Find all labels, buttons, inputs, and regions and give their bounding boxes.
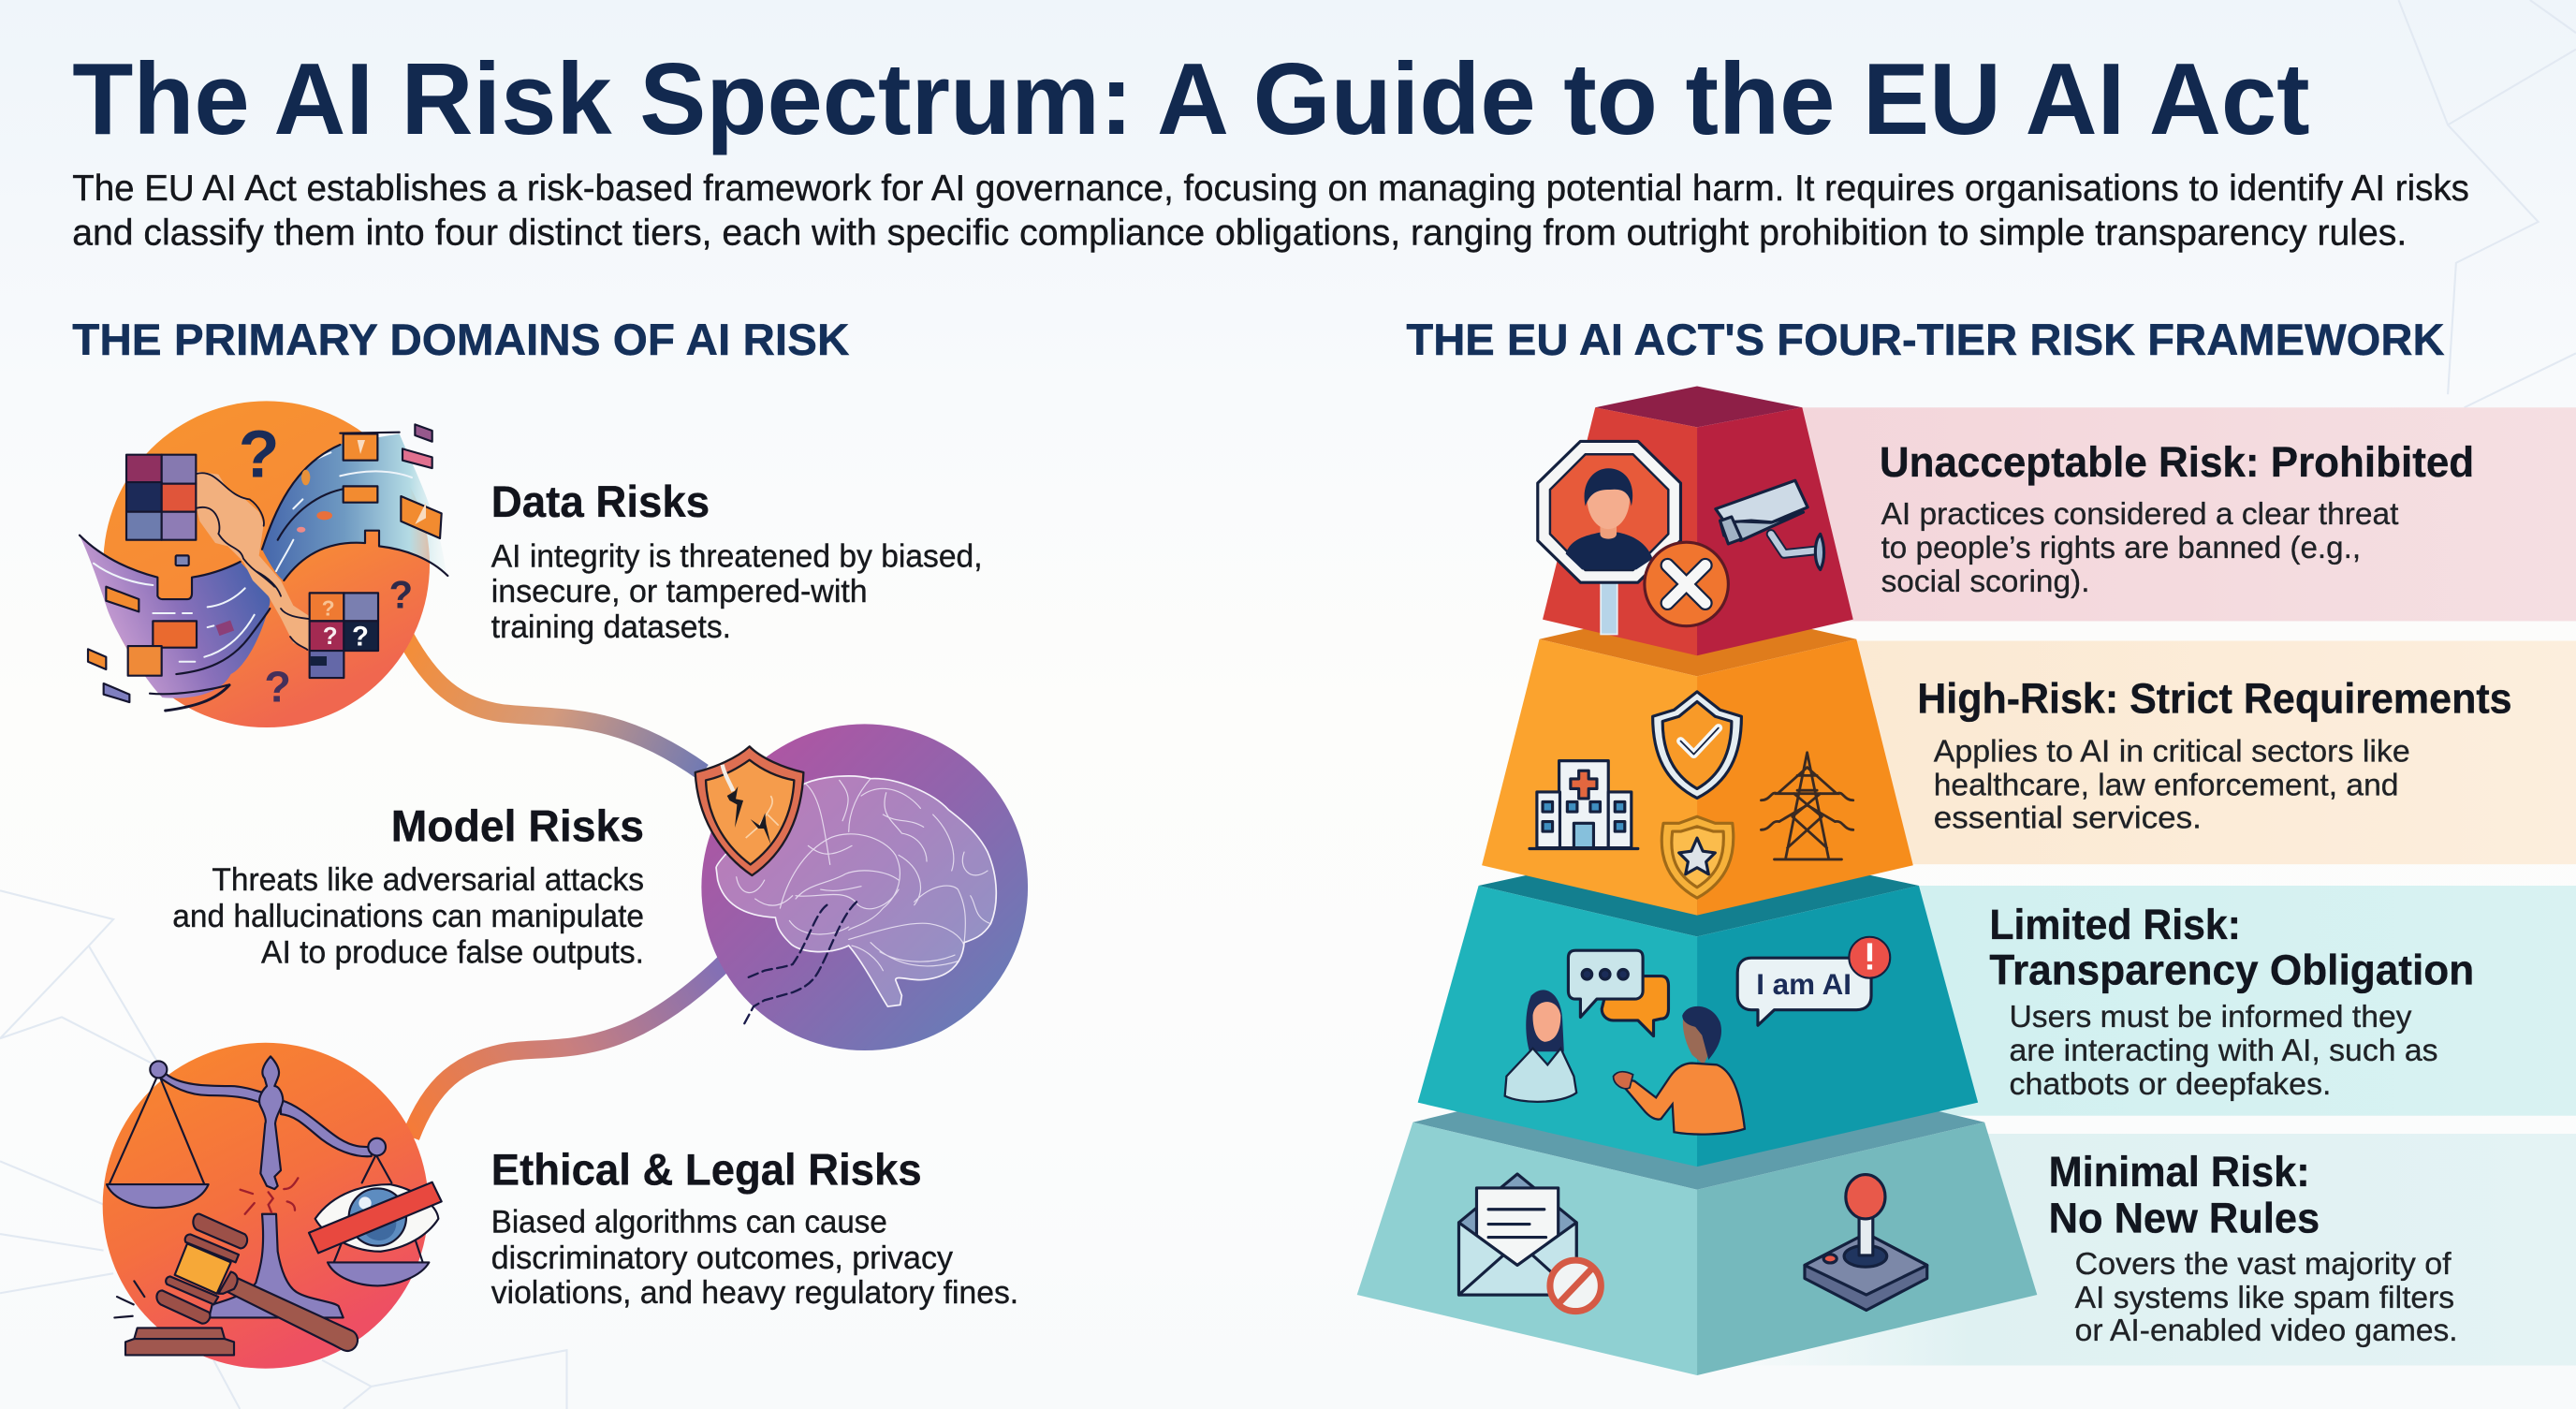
block: limited risk text: Transparency Obligation [1989,946,2474,993]
block: ethical and legal text: Biased algorithms can cause [491,1204,887,1240]
panel: minimal risk band [1708,1134,2576,1365]
block: high-risk text: Applies to AI in critical sectors like [1934,734,2410,769]
block: unacceptable risk text: to people’s rights are banned (e.g., [1881,531,2361,565]
block: data risks text: Data Risks [491,477,710,527]
icon: power pylon [1761,753,1853,859]
icon: model risks brain [701,724,1028,1050]
icon: data risks illustration [80,401,447,727]
intro paragraph: The EU AI Act establishes a risk-based framework for AI governance, focusing on managing potential harm. It requires organisations to identify AI risks [72,169,2469,209]
icon: data risks illustration: ? [323,622,338,650]
block: limited risk text: Users must be informed they [2009,1000,2412,1035]
icon: shield with check [1653,692,1741,798]
block: model risks text: and hallucinations can manipulate [172,899,644,934]
icon: data risks illustration: ? [239,417,280,492]
block: unacceptable risk text: Unacceptable Risk: Prohibited [1880,438,2474,486]
block: limited risk text [1989,901,2474,1102]
icon: data risks illustration: ? [264,662,291,711]
icon: envelope with blocked sign [1459,1174,1601,1312]
block: minimal risk text: Covers the vast majority of [2075,1247,2452,1282]
icon: stop sign with person [1538,441,1680,634]
heading: primary domains: THE PRIMARY DOMAINS OF AI RISK [72,316,849,365]
callout: I am AI bubble [1737,937,1890,1025]
intro paragraph: and classify them into four distinct tiers, each with specific compliance obligations, ranging from outright prohibition to simple transparency rules. [72,213,2407,254]
icon: man [1614,1006,1745,1135]
pyramid tier: minimal risk [1357,1053,2037,1375]
block: minimal risk text: AI systems like spam filters [2075,1281,2454,1315]
block: data risks text: training datasets. [491,609,731,645]
block: model risks text [172,802,644,970]
title: The AI Risk Spectrum: A Guide to the EU AI Act [72,42,2310,156]
block: high-risk text [1917,675,2512,836]
block: limited risk text: chatbots or deepfakes. [2009,1067,2331,1102]
panel: unacceptable risk band [1741,407,2576,621]
block: ethical and legal text: discriminatory outcomes, privacy [491,1240,954,1276]
icon: X mark [1645,542,1728,626]
block: minimal risk text: Minimal Risk: [2049,1148,2310,1196]
icon: hospital [1530,761,1638,849]
icon: CCTV camera [1716,480,1824,569]
block: ethical and legal text: violations, and heavy regulatory fines. [491,1275,1018,1311]
icon: ethical and legal scales [103,1043,442,1369]
pyramid tier: limited risk [1418,838,1978,1167]
block: high-risk text: healthcare, law enforcement, and [1934,768,2398,802]
connector: ethics to model [411,961,726,1137]
intro paragraph [72,169,2469,254]
icon: joystick [1805,1175,1927,1311]
block: data risks text: AI integrity is threatened by biased, [491,539,983,575]
heading: four-tier framework: THE EU AI ACT'S FOUR-TIER RISK FRAMEWORK [1406,316,2445,365]
connector: data to model [406,638,703,772]
icon: woman [1505,990,1576,1102]
block: unacceptable risk text: AI practices considered a clear threat [1881,497,2399,532]
block: ethical and legal text [491,1145,1018,1311]
pyramid tier: unacceptable risk [1538,386,1853,655]
block: limited risk text: Limited Risk: [1989,901,2241,948]
block: model risks text: Model Risks [391,802,644,852]
icon: chat bubbles [1568,950,1668,1036]
panel: high-risk band [1808,640,2576,864]
block: data risks text: insecure, or tampered-with [491,574,868,609]
block: unacceptable risk text [1880,438,2474,599]
block: high-risk text: High-Risk: Strict Requirements [1917,675,2512,723]
icon: data risks illustration: ? [389,572,413,616]
block: model risks text: AI to produce false outputs. [261,934,644,970]
panel: limited risk band [1856,886,2576,1116]
block: minimal risk text: or AI-enabled video games. [2075,1314,2458,1348]
icon: data risks illustration: ? [352,621,369,652]
callout: I am AI bubble: I am AI [1756,967,1852,1001]
block: limited risk text: are interacting with AI, such as [2009,1034,2438,1068]
icon: data risks illustration: ? [322,595,335,620]
block: ethical and legal text: Ethical & Legal Risks [491,1145,922,1195]
icon: cracked shield [695,746,803,875]
block: high-risk text: essential services. [1934,801,2202,836]
block: model risks text: Threats like adversarial attacks [212,862,644,898]
block: unacceptable risk text: social scoring). [1881,565,2089,599]
block: minimal risk text [2049,1148,2458,1348]
block: data risks text [491,477,983,645]
icon: police badge [1661,816,1734,898]
pyramid tier: high-risk [1482,603,1913,916]
block: minimal risk text: No New Rules [2049,1194,2320,1241]
